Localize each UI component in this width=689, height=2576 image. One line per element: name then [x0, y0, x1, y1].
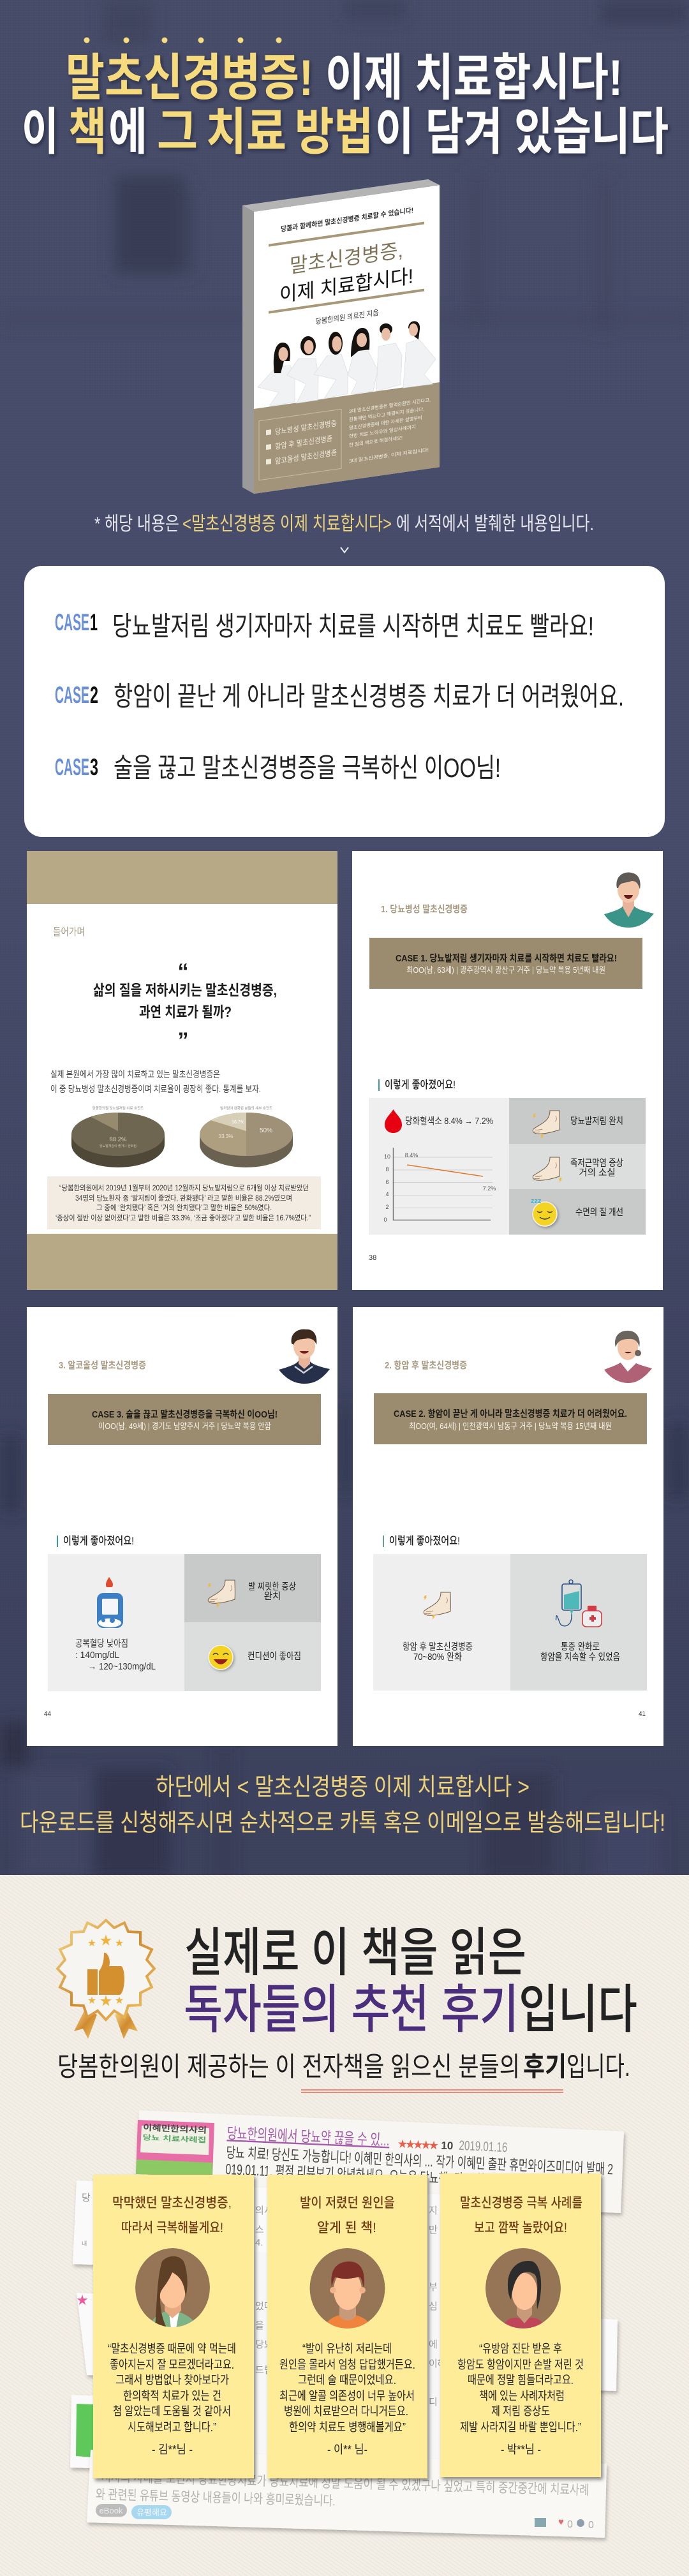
gap text fragments: 의시: [255, 2205, 273, 2216]
case 3: 술을 끊고 말초신경병증을 극복하신 이OO님!: [114, 753, 501, 783]
pie chart left: 당봄한의원 당뇨발저림 치료 호전도: [93, 1106, 144, 1111]
portrait: man with red hair: [310, 2248, 385, 2332]
page stat box: ‘증상이 절반 이상 없어졌다’고 말한 비율은 33.3%, ‘조금 좋아졌다’고 말한 비율은 16.7%였다.”: [56, 1213, 311, 1222]
page heading: 1. 당뇨병성 말초신경병증: [381, 903, 468, 915]
card headline: [300, 2196, 395, 2235]
card quote: - 박**님 -: [501, 2443, 541, 2456]
gap text fragments: 지: [429, 2205, 438, 2216]
outcome panel: fasting glucose: [48, 1554, 184, 1691]
outcome row 2: [184, 1622, 321, 1691]
case 1: CASE: [55, 609, 89, 635]
section subheading: 입니다.: [567, 2052, 630, 2082]
case band: CASE 2. 항암이 끝난 게 아니라 말초신경병증 치료가 더 어려웠어요.: [394, 1408, 627, 1419]
panel: line chart: 4: [385, 1191, 389, 1197]
review card bottom: 0: [588, 2520, 594, 2531]
pink star: ★: [77, 2294, 88, 2307]
portrait: woman with long brown hair: [135, 2248, 210, 2328]
card headline: [112, 2196, 232, 2235]
section heading: 입니다: [519, 1981, 637, 2039]
pie chart right: [200, 1106, 293, 1167]
review card 1: [93, 2175, 254, 2478]
outcome row 3: 수면의 질 개선: [575, 1207, 623, 1218]
review card top: 10: [441, 2140, 454, 2152]
gap text fragments: 었다: [255, 2301, 273, 2312]
page quote: ”: [177, 1028, 189, 1053]
page body text: 실제 본원에서 가장 많이 치료하고 있는 말초신경병증은: [50, 1069, 220, 1079]
case 2: CASE: [55, 682, 89, 708]
case band: CASE 1. 당뇨발저림 생기자마자 치료를 시작하면 치료도 빨라요!: [396, 953, 617, 964]
outcome row 1: [509, 1098, 646, 1144]
card headline: 알게 된 책!: [317, 2221, 376, 2235]
page heading: 3. 알코올성 말초신경병증: [59, 1359, 146, 1371]
page stat box: [47, 1176, 321, 1229]
outcome row 2: [509, 1144, 646, 1189]
section subheading: 후기: [523, 2052, 567, 2082]
book spine: [242, 205, 254, 494]
title: 이: [22, 103, 59, 160]
book cover: 한방 치료 노하우와 일상사례까지: [349, 423, 416, 440]
icon: thumbs up badge: [57, 1920, 154, 2039]
outcome row 1: 완치: [264, 1591, 281, 1602]
card quote: 그래서 방법없나 찾아보다가: [115, 2373, 229, 2387]
review card third: [77, 2293, 618, 2391]
case band: [374, 1393, 647, 1444]
pie chart right: 발저림이 완화된 분들의 세부 호전도: [220, 1106, 272, 1111]
icon: thumbs up badge: ★: [115, 1995, 124, 2005]
case band: 최OO(남, 63세) | 광주광역시 광산구 거주 | 당뇨약 복용 5년째 내원: [406, 965, 605, 975]
panel: line chart: 2: [385, 1204, 389, 1210]
case 3: CASE: [55, 754, 89, 780]
panel: line chart: [369, 1098, 509, 1235]
icon: thumbs up badge: ★: [100, 1995, 112, 2008]
underline accent: [301, 2089, 563, 2093]
review card top: ★★★★★: [397, 2139, 439, 2151]
footnote: * 해당 내용은: [94, 514, 179, 535]
subheading: 이렇게 좋아졌어요!: [385, 1079, 456, 1091]
title: 책: [68, 103, 107, 160]
book cover: 말초신경병증에 대한 자세한 설명부터: [349, 414, 422, 431]
background: blurred bookshelf: [0, 0, 689, 1882]
page stat box: “당봄한의원에서 2019년 1월부터 2020년 12월까지 당뇨발저림으로 6개월 이상 치료받았던: [59, 1183, 309, 1192]
title: [22, 49, 669, 160]
green thumbnail: [76, 2404, 93, 2457]
review card bottom: [87, 2450, 607, 2538]
outcome row 2: 족저근막염 증상: [570, 1158, 623, 1169]
panel: line chart: 7.2%: [483, 1185, 496, 1192]
card quote: 책에 있는 사례자처럼: [479, 2389, 565, 2402]
card quote: 그런데 술 때문이었네요.: [298, 2373, 396, 2387]
review card bottom: 유평해요: [137, 2508, 167, 2517]
page quote: 삶의 질을 저하시키는 말초신경병증,: [93, 982, 277, 998]
outcome row 3: [509, 1189, 646, 1235]
pie chart right: 33.3%: [219, 1134, 233, 1139]
panel: reviews section background: [0, 1875, 689, 2576]
review card bottom: eBook: [100, 2506, 123, 2515]
panel: book page case 1: [352, 851, 663, 1290]
panel: line chart: 8.4%: [405, 1152, 418, 1158]
icon: IV bag and medicine bottle: [556, 1580, 602, 1627]
card headline: 말초신경병증 극복 사례를: [460, 2196, 582, 2210]
card headline: 막막했던 말초신경병증,: [112, 2196, 232, 2210]
outcome left: [373, 1554, 510, 1691]
book cover: [254, 185, 440, 494]
card headline: [460, 2196, 582, 2235]
gap text fragments: 을: [255, 2320, 264, 2331]
pie chart right: 50%: [260, 1127, 272, 1134]
gap text fragments: 스: [255, 2224, 264, 2235]
page quote: “: [177, 959, 189, 984]
section heading: 독자들의 추천 후기: [184, 1981, 519, 2039]
gap text fragments: 이혜: [429, 2358, 447, 2369]
review card top: 당뇨한의원에서 당뇨약 끊을 수 있...: [226, 2125, 390, 2149]
footnote: 에 서적에서 발췌한 내용입니다.: [396, 514, 594, 535]
page quote: 과연 치료가 될까?: [139, 1003, 232, 1020]
card quote: 좋아지는지 잘 모르겠더라고요.: [110, 2358, 234, 2371]
card quote: “말초신경병증 때문에 약 먹는데: [108, 2342, 236, 2355]
card headline: 따라서 극복해볼게요!: [121, 2221, 223, 2235]
pie chart right: 16.7%: [232, 1120, 244, 1125]
footnote: <말초신경병증 이제 치료합시다>: [182, 514, 392, 535]
gap text fragments: 심: [429, 2301, 438, 2312]
review card fourth: [70, 2395, 447, 2478]
page heading: 2. 항암 후 말초신경병증: [385, 1359, 467, 1371]
gap text fragments: 만: [429, 2224, 438, 2235]
book cover: 알코올성 말초신경병증: [275, 448, 337, 466]
title: 치료: [206, 103, 286, 160]
card quote: 한의약 치료도 병행해볼게요”: [289, 2420, 406, 2434]
case band: CASE 3. 술을 끊고 말초신경병증을 극복하신 이OO님!: [92, 1409, 278, 1420]
card quote: 병원에 치료받으러 다니거든요.: [284, 2404, 408, 2418]
page stat box: 34명의 당뇨환자 중 ‘발저림이 줄었다, 완화됐다’ 라고 말한 비율은 88.2%였으며: [75, 1194, 292, 1203]
subheading: 이렇게 좋아졌어요!: [389, 1535, 460, 1547]
icon: elderly woman avatar: [604, 1331, 652, 1383]
panel: line chart: 8: [385, 1166, 389, 1173]
card quote: - 이** 님-: [327, 2443, 367, 2456]
decorative dots above title: [84, 37, 282, 43]
book cover: 진통제만 먹는다고 해결되지 않습니다.: [349, 406, 424, 423]
panel: case list: [24, 566, 665, 837]
page quote: [93, 959, 277, 1053]
section subheading: 당봄한의원이 제공하는 이 전자책을 읽으신 분들의: [57, 2052, 520, 2082]
card quote: [279, 2342, 415, 2456]
chevron arrow: [341, 547, 348, 552]
gap text fragments: 디: [429, 2397, 438, 2408]
icon: thumbs up badge: ★: [115, 1938, 124, 1948]
card quote: 제발 사라지길 바랄 뿐입니다.”: [460, 2420, 581, 2434]
card quote: [457, 2342, 584, 2456]
book cover: 한 권의 책으로 해결하세요!: [349, 434, 403, 448]
outcome left: 70~80% 완화: [413, 1652, 462, 1662]
icon: young male avatar: [279, 1329, 330, 1384]
book mockup: [242, 179, 440, 494]
panel: line chart: 6: [385, 1179, 389, 1185]
title: 말초신경병증!: [66, 49, 313, 106]
icon: glucose meter: [97, 1577, 123, 1628]
gap text fragments: 당뇨: [255, 2339, 273, 2350]
pie chart left: 당뇨발저림이 좋거나 완화됨: [100, 1144, 137, 1148]
card quote: 제 저림 증상도: [491, 2404, 550, 2418]
icon: thumbs up badge: ★: [87, 1995, 96, 2005]
case band: [48, 1394, 321, 1445]
icon: blood drop: [385, 1109, 402, 1133]
section heading: [184, 1924, 637, 2039]
page body text: [50, 1069, 261, 1094]
outcome row 2: 거의 소실: [579, 1167, 616, 1178]
review card top: 2019.01.16: [459, 2138, 508, 2155]
card quote: [108, 2342, 236, 2456]
case 1: 1: [90, 609, 98, 635]
book cover: 3대 말초신경병증, 이제 치료합시다!: [349, 447, 429, 464]
card quote: 항암도 항암이지만 손발 저린 것: [457, 2358, 584, 2371]
panel: line chart: 당화혈색소 8.4% → 7.2%: [405, 1116, 493, 1127]
review card 3: [440, 2173, 601, 2477]
page heading: 들어가며: [53, 926, 85, 938]
page number: 41: [639, 1710, 646, 1718]
page body text: 이 중 당뇨병성 말초신경병증이며 치료율이 굉장히 좋다. 통계를 보자.: [50, 1084, 261, 1094]
outcome panel: fasting glucose: : 140mg/dL: [75, 1650, 119, 1661]
outcome right: 항암을 지속할 수 있었음: [540, 1652, 620, 1662]
title: 이제 치료합시다!: [325, 49, 623, 106]
card headline: 보고 깜짝 놀랐어요!: [474, 2221, 567, 2235]
gap text fragments: 드림: [255, 2365, 273, 2376]
card quote: - 김**님 -: [152, 2443, 193, 2456]
panel: line chart: 0: [383, 1217, 387, 1223]
card quote: 시도해보려고 합니다.”: [128, 2420, 216, 2434]
outcome row 1: 당뇨발저림 완치: [570, 1116, 623, 1127]
card quote: 첨 알았는데 도움될 것 같아서: [113, 2404, 231, 2418]
icon: thumbs up badge: ★: [87, 1938, 96, 1948]
panel: book page intro: [27, 851, 337, 1290]
case 3: [55, 753, 501, 783]
book cover: 당봄한의원 의료진 지음: [315, 308, 379, 326]
background review screenshots: [70, 2110, 624, 2538]
outcome panel: fasting glucose: 공복혈당 낮아짐: [75, 1638, 128, 1649]
card quote: 때문에 정말 힘들더라고요.: [468, 2373, 574, 2387]
book cover: 말초신경병증,: [290, 239, 403, 278]
case band: 최OO(여, 64세) | 인천광역시 남동구 거주 | 당뇨약 복용 15년째 내원: [409, 1421, 612, 1431]
download notice: [20, 1774, 665, 1837]
panel: book page case 2: [353, 1307, 663, 1746]
review card bottom: 와 관련된 유튜브 동영상 내용들이 나와 흥미로웠습니다.: [96, 2487, 336, 2508]
book cover: 당봄과 함께하면 말초신경병증 치료할 수 있습니다!: [281, 205, 413, 233]
outcome row 3: zzz: [531, 1197, 542, 1205]
book cover: 3대 말초신경병증은 혈액순환만 시킨다고,: [349, 396, 431, 415]
gap text fragments: 당: [82, 2193, 91, 2203]
pie chart left: [71, 1106, 165, 1167]
card quote: “발이 유난히 저리는데: [302, 2342, 392, 2355]
outcome row 1: 발 찌릿한 증상: [248, 1581, 296, 1592]
case band: [369, 938, 642, 989]
portrait: woman with black hair: [485, 2248, 561, 2332]
outcome left: 항암 후 말초신경병증: [403, 1641, 473, 1652]
icon: male patient avatar: [604, 873, 654, 928]
title: 그: [157, 103, 198, 160]
review card bottom: ♥: [558, 2517, 564, 2528]
gap text fragments: [82, 2193, 447, 2408]
outcome right: [510, 1554, 647, 1691]
book cover: 당뇨병성 말초신경병증: [275, 418, 337, 436]
gap text fragments: 내: [82, 2240, 87, 2247]
page number: 44: [44, 1710, 51, 1718]
section heading: 실제로 이 책을 읽은: [184, 1924, 526, 1982]
pie chart left: 88.2%: [110, 1136, 127, 1143]
outcome row 1: [184, 1554, 321, 1622]
review card top: [136, 2110, 624, 2213]
review card top: 당뇨 치료사례집: [142, 2133, 207, 2145]
gap text fragments: 부: [429, 2282, 438, 2293]
review card 2: [267, 2175, 427, 2478]
title: 방법: [295, 103, 373, 160]
doctors photo: [258, 321, 436, 406]
subheading: 이렇게 좋아졌어요!: [63, 1535, 134, 1547]
outcome right: 통증 완화로: [561, 1641, 600, 1652]
case band: 이OO(남, 49세) | 경기도 남양주시 거주 | 당뇨약 복용 안함: [98, 1421, 271, 1431]
outcome row 2: 컨디션이 좋아짐: [248, 1651, 301, 1662]
book top edge: [242, 179, 440, 212]
book cover: 항암 후 말초신경병증: [275, 434, 332, 451]
outcome panel: fasting glucose: → 120~130mg/dL: [88, 1661, 156, 1672]
gap text fragments: 에: [429, 2339, 438, 2350]
page number: 38: [369, 1254, 376, 1262]
download notice: 하단에서 < 말초신경병증 이제 치료합시다 >: [156, 1774, 530, 1801]
review card second: [73, 2180, 447, 2277]
panel: line chart: 10: [384, 1153, 390, 1160]
card quote: 한의학적 치료가 있는 건: [123, 2389, 221, 2402]
page stat box: 그 중에 ‘완치됐다’ 혹은 ‘거의 완치됐다’고 말한 비율은 50%였다.: [96, 1203, 272, 1212]
icon: thumbs up badge: ★: [100, 1934, 112, 1948]
card headline: 발이 저렸던 원인을: [300, 2196, 395, 2210]
case 3: 3: [90, 754, 98, 780]
card quote: “유방암 진단 받은 후: [479, 2342, 562, 2355]
gap text fragments: 4.: [255, 2237, 263, 2248]
card quote: 원인을 몰라서 엄청 답답했거든요.: [279, 2358, 415, 2371]
card quote: 최근에 알콜 의존성이 너무 높아서: [279, 2389, 415, 2402]
title: 에: [108, 103, 147, 160]
book cover: 이제 치료합시다!: [279, 265, 413, 306]
footnote: [94, 514, 594, 535]
review card bottom: 0: [567, 2519, 573, 2530]
case 2: 2: [90, 682, 98, 708]
panel: book page case 3: [27, 1307, 337, 1746]
review card top: 이혜민한의사의: [143, 2122, 207, 2135]
